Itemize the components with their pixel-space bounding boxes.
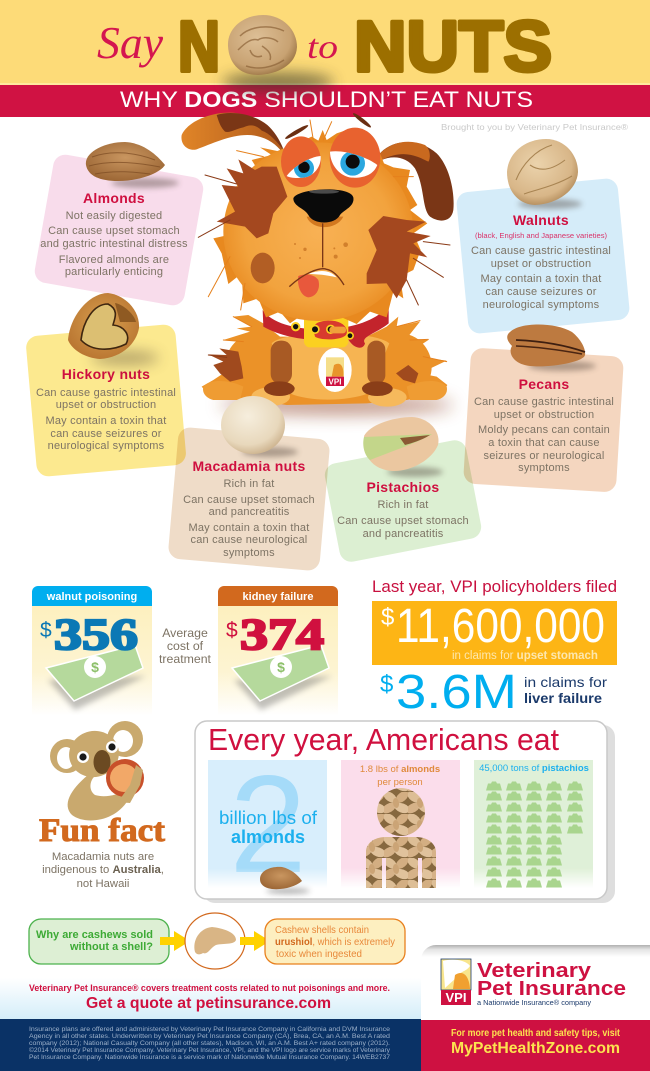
chest [272,333,389,400]
macadamia facts: and pancreatitis [209,506,290,518]
callout: 11.6M claims: $ [381,604,394,631]
stat label: average cost [159,626,212,666]
ground shadow [220,396,453,414]
coverage statement: Veterinary Pet Insurance® covers treatment costs related to nut poisonings and more. [29,983,390,994]
cheek patch [251,253,275,283]
column: 2 billion lbs: billion lbs of [219,808,318,828]
amount 356 [40,610,138,659]
walnut facts [471,245,611,311]
column: 2 billion lbs: 2 [229,747,307,902]
legal footer: ©2014 Veterinary Pet Insurance Company. Veterinary Pet Insurance, VPI, and the VPI logo are service marks of Veterinary [29,1046,391,1054]
callout: 11.6M claims: 11,600,000 [396,600,605,653]
heading: pistachios: Pistachios [366,479,440,495]
fun fact text [42,851,164,890]
column: 1.8 lbs per person: 1.8 lbs of almonds [360,764,440,775]
walnut facts: May contain a toxin that [481,273,601,285]
macadamia facts: May contain a toxin that [189,522,309,534]
right eye [330,128,380,188]
word: to: to [307,29,338,66]
pecan facts [474,396,614,474]
logo wordmark: Pet Insurance [477,977,626,1000]
walnut varieties note: (black, English and Japanese varieties) [475,231,608,240]
icon: pistachio [363,417,443,477]
body and haunches [202,315,447,405]
walnut shadow [222,72,334,92]
arrow: question to cashew [160,931,190,951]
macadamia facts: Can cause upset stomach [183,494,315,506]
collar [263,305,389,348]
callout: 3.6M claims: $ [380,671,393,698]
amount 374: $ [226,619,238,642]
almond facts: Can cause upset stomach [48,225,180,237]
almond facts: Not easily digested [66,210,162,222]
whiskers and stray hairs [198,120,450,362]
icon: cashew in circle [185,913,245,969]
header label: kidney failure [243,591,313,603]
header banner [0,0,650,87]
right ear [380,142,454,221]
amount 374: 374 [240,610,324,659]
eyebrows [284,112,372,140]
pistachio facts: and pancreatitis [363,528,444,540]
stat label: average cost: Average [162,626,208,640]
VPI tag [318,348,352,392]
letter N of No: N [178,8,220,87]
icon: macadamia nut [221,396,298,457]
column: 2 billion lbs: almonds [231,827,305,847]
pistachio facts [337,499,469,540]
red subtitle band [0,85,650,117]
question box: cashews: without a shell? [69,941,153,953]
walnut facts: neurological symptoms [483,299,600,311]
icon: hickory nut [68,293,159,365]
left fur patch [217,159,287,238]
callout: 3.6M claims [380,666,607,719]
amount 374 [226,610,324,659]
pecan facts: seizures or neurological [484,450,604,462]
muzzle shadow [307,217,343,227]
walnut facts: upset or obstruction [491,258,591,270]
icon: walnut as letter O [228,15,297,75]
answer box: urushiol: toxic when ingested [276,949,362,960]
answer box: urushiol: urushiol, which is extremely [275,937,395,948]
icon: VPI logo mark: VPI [446,990,466,1005]
pistachio facts: Rich in fat [377,499,429,511]
almond facts: Flavored almonds are [59,254,169,266]
panel: every year Americans eat [195,721,615,903]
heading: pecans: Pecans [519,376,569,392]
callout: 11.6M claims: in claims for upset stomach [452,650,598,662]
logo wordmark: Veterinary [477,959,592,982]
stat label: average cost: cost of [167,639,204,653]
amount 356: $ [40,619,52,642]
panel: pet health zone: For more pet health and safety tips, visit [451,1027,620,1039]
VPI tag: VPI [329,377,341,386]
panel: VPI logo [421,945,650,1020]
pistachio facts: Can cause upset stomach [337,515,469,527]
macadamia facts: Rich in fat [223,478,275,490]
fun fact text: not Hawaii [77,878,129,890]
column: 45,000 tons: 45,000 tons of pistachios [479,763,589,774]
icon: koala holding nut [50,721,144,820]
almond facts: and gastric intestinal distress [40,238,188,250]
hickory facts: neurological symptoms [48,440,165,452]
column: 1.8 lbs per person [341,760,460,888]
left ear [181,113,284,152]
dog illustration [181,112,454,414]
question box: cashews: Why are cashews sold [36,929,153,941]
rear fur patches [208,348,243,382]
hickory facts: Can cause gastric intestinal [36,387,176,399]
logo wordmark [477,959,626,1000]
column: 2 billion lbs [208,747,327,902]
nose [293,189,353,222]
legal footer: Pet Insurance Company. Nationwide Insurance is a service mark of Nationwide Mutual Insurance Company. 14WEB2737 [29,1054,390,1061]
panel: almonds [33,153,205,307]
fun fact text: Macadamia nuts are [52,851,154,863]
pecan facts: symptoms [518,462,570,474]
column: 45,000 tons [474,760,593,888]
heading: macadamia: Macadamia nuts [192,458,306,474]
callout: 3.6M claims: liver failure [524,690,602,706]
blue fade footer background [0,978,421,1020]
panel: pet health zone [421,1020,650,1071]
answer box: urushiol: Cashew shells contain [275,925,369,936]
hickory facts: May contain a toxin that [46,415,166,427]
header label: walnut poisoning [46,591,137,603]
pecan facts: a toxin that can cause [488,437,600,449]
left foreleg [251,341,295,406]
amount 356: 356 [54,610,138,659]
callout: 3.6M claims: in claims for [524,674,607,690]
callout: 3.6M claims: 3.6M [396,666,517,719]
heading: Every year, Americans eat [208,722,559,757]
stat card: walnut poisoning [32,586,152,716]
legal footer: Agency in all other states. Underwritten by Veterinary Pet Insurance Company (CA), Brea, CA, an A.M. Best A rated [29,1033,390,1040]
legal footer [0,1019,421,1071]
panel: pet health zone: MyPetHealthZone.com [451,1040,620,1057]
word: Say: Say [97,17,164,68]
stat card: kidney failure [218,586,338,716]
heading: almonds: Almonds [83,190,145,206]
heading: last year claims: Last year, VPI policyholders filed [372,577,617,596]
logo tagline: a Nationwide Insurance® company [477,998,591,1007]
heading: fun fact: Fun fact [39,813,165,849]
left eye [281,136,321,187]
icon: dollar bill: $ [91,659,99,675]
macadamia facts [183,478,315,559]
heading: hickory: Hickory nuts [62,366,150,382]
right foreleg [362,341,407,407]
panel: hickory nuts [25,324,187,477]
column: 1.8 lbs per person: per person [377,777,423,788]
credit line: Brought to you by Veterinary Pet Insurance® [441,122,629,132]
macadamia facts: symptoms [223,547,275,559]
fun fact text: indigenous to Australia, [42,864,164,876]
panel: pecans [463,347,624,493]
walnut facts: can cause seizures or [485,286,597,298]
arrow: cashew to answer [240,931,270,951]
macadamia facts: can cause neurological [191,534,307,546]
hickory facts [36,387,176,452]
panel: macadamia nuts [168,427,330,571]
icon: pecan [507,324,596,371]
walnut facts: Can cause gastric intestinal [471,245,611,257]
legal footer: Insurance plans are offered and administered by Veterinary Pet Insurance Company in California and DVM Insurance [29,1026,390,1033]
pecan facts: Can cause gastric intestinal [474,396,614,408]
answer box: urushiol [265,919,405,964]
right fur patch [367,216,431,298]
callout: 11.6M claims [372,600,617,665]
legal footer: company (2012); National Casualty Company (all other states), Madison, WI, an A.M. Best A+ rated company (2012). [29,1040,390,1047]
pecan facts: Moldy pecans can contain [478,424,610,436]
icon: walnut [507,139,582,209]
pecan facts: upset or obstruction [494,409,594,421]
almond facts: particularly enticing [65,266,163,278]
icon: almond nut [86,142,179,188]
hickory facts: can cause seizures or [50,428,162,440]
question box: cashews [29,919,169,964]
subtitle: WHY DOGS SHOULDN’T EAT NUTS [120,87,533,112]
head fur [213,130,427,324]
icon: dollar bill: $ [277,659,285,675]
panel: pistachios [323,438,483,564]
stat label: average cost: treatment [159,652,212,666]
call to action: Get a quote at petinsurance.com [86,995,331,1012]
panel: walnuts [456,178,630,334]
almond facts [40,210,188,278]
heading: walnuts: Walnuts [513,212,569,228]
hickory facts: upset or obstruction [56,399,156,411]
mouth and tongue [289,223,348,297]
word: NUTS: NUTS [354,8,552,87]
icon: VPI logo mark [441,959,471,1005]
